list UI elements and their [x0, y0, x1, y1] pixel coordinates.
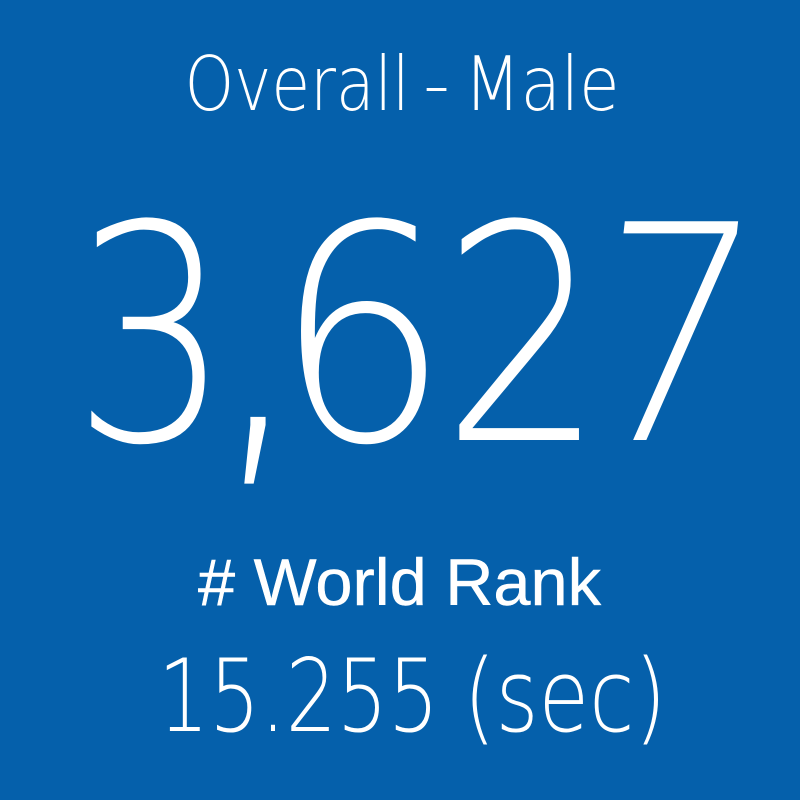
- time value: (sec): [464, 637, 666, 755]
- metric label: # World Rank: [198, 545, 602, 619]
- title: Male: [464, 40, 620, 128]
- big number: world rank value: ,: [209, 93, 307, 529]
- big number: world rank value: 3: [72, 163, 231, 512]
- big number: world rank value: 2: [442, 161, 605, 511]
- time value: 15.255: [158, 637, 439, 755]
- big number: world rank value: 6: [274, 161, 450, 511]
- time value: [158, 637, 666, 755]
- title: [185, 40, 620, 128]
- title: -: [423, 40, 450, 128]
- big number: world rank value: 7: [572, 161, 773, 511]
- big number: world rank value: [72, 93, 773, 529]
- title: Overall: [185, 40, 410, 128]
